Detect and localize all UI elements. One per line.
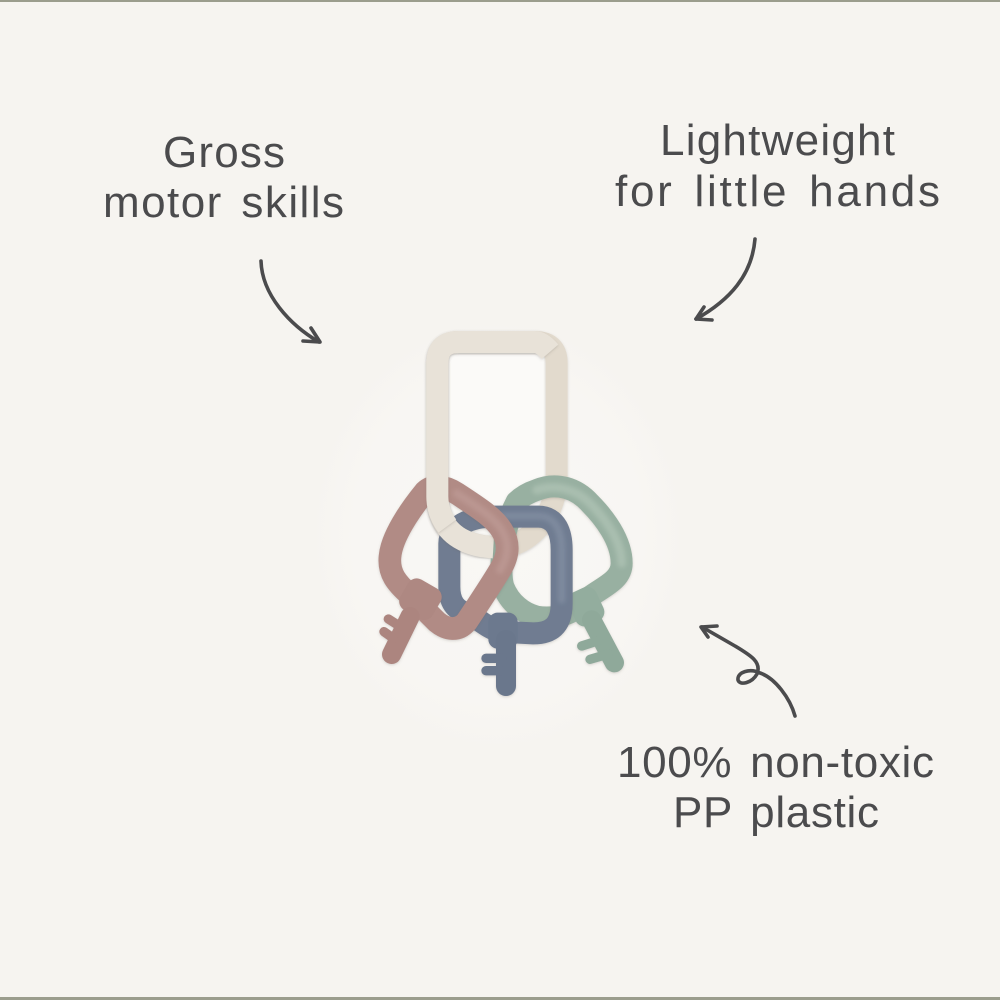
label: lightweight: Lightweight xyxy=(660,116,895,165)
green key xyxy=(501,486,622,663)
product: key teether rings xyxy=(384,337,622,686)
label: gross motor skills xyxy=(103,128,344,227)
label: gross motor skills: Gross xyxy=(163,128,285,177)
label: non-toxic xyxy=(617,738,934,837)
pink key xyxy=(384,487,507,654)
arrow: lightweight xyxy=(696,239,755,320)
label: lightweight: for little hands xyxy=(615,167,940,216)
arrow: gross motor skills xyxy=(261,261,320,342)
cream ring, front leg xyxy=(433,337,550,526)
blue key xyxy=(449,516,562,686)
label: non-toxic: PP plastic xyxy=(673,788,879,837)
arrow: non-toxic xyxy=(701,626,795,716)
label: non-toxic: 100% non-toxic xyxy=(617,738,934,787)
cream ring, lower left pass xyxy=(437,493,493,547)
cream ring, full xyxy=(437,342,557,547)
label: lightweight xyxy=(615,116,940,216)
label: gross motor skills: motor skills xyxy=(103,178,344,227)
